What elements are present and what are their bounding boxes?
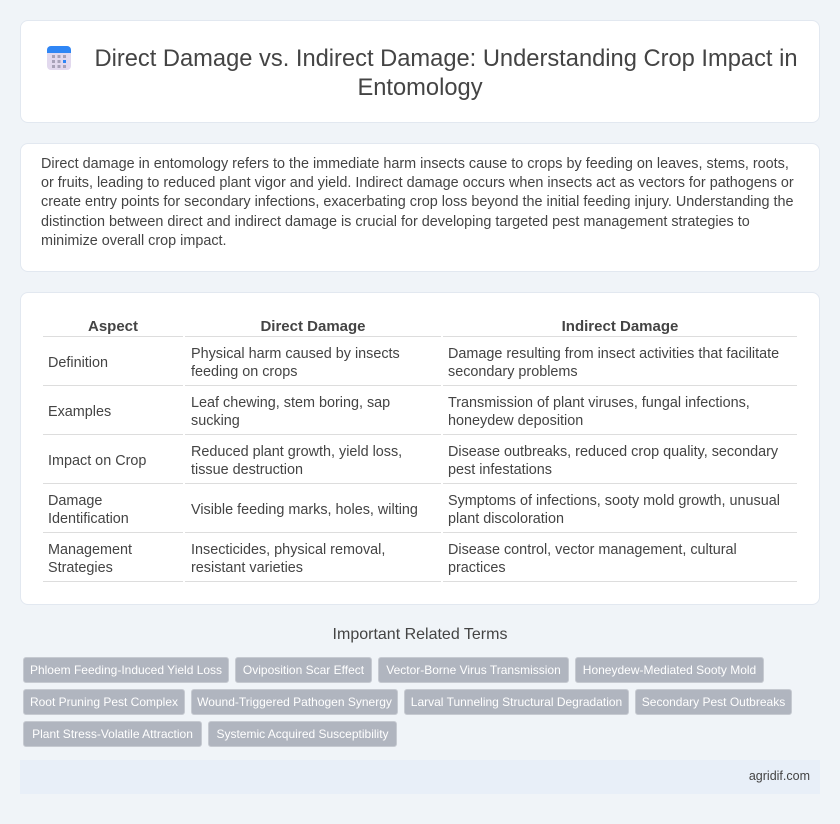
tags: related terms	[23, 657, 792, 747]
row: impact on crop	[48, 444, 778, 478]
title	[94, 46, 798, 101]
row: impact on crop: pest infestations	[448, 462, 552, 478]
text block: introduction: Direct damage in entomology refers to the immediate harm insects cause to crops by feeding on leaves, stems, roots,	[41, 156, 789, 172]
table header: direct damage: Direct Damage	[260, 318, 366, 335]
row: management strategies: practices	[448, 560, 506, 576]
row: definition	[48, 346, 779, 380]
row: impact on crop: Reduced plant growth, yield loss,	[191, 444, 402, 460]
tags: related terms: Systemic Acquired Susceptibility	[216, 727, 389, 741]
tags: related terms: Oviposition Scar Effect	[243, 663, 364, 677]
tags: related terms: Secondary Pest Outbreaks	[642, 695, 785, 709]
text block: introduction: minimize overall crop impact.	[41, 233, 227, 249]
row: impact on crop: Disease outbreaks, reduced crop quality, secondary	[448, 444, 778, 460]
tags: related terms: Root Pruning Pest Complex	[30, 695, 178, 709]
row: management strategies: Strategies	[48, 560, 113, 576]
tags: related terms: Honeydew-Mediated Sooty Mold	[583, 663, 756, 677]
row: examples: Examples	[48, 404, 111, 420]
table header: aspect: Aspect	[88, 318, 138, 335]
footer: agridif.com	[749, 769, 810, 783]
row: definition: Damage resulting from insect activities that facilitate	[448, 346, 779, 362]
row: examples: sucking	[191, 413, 240, 429]
title: Direct Damage vs. Indirect Damage: Understanding Crop Impact in	[94, 46, 798, 72]
panel: introduction	[20, 143, 820, 272]
tags: related terms: Larval Tunneling Structural Degradation	[411, 695, 622, 709]
footer	[20, 760, 820, 794]
row: definition: feeding on crops	[191, 364, 297, 380]
row: damage identification: Symptoms of infections, sooty mold growth, unusual	[448, 493, 780, 509]
heading: important related terms: Important Related Terms	[333, 626, 507, 643]
text block: introduction: distinction between direct and indirect damage is crucial for developing targeted pest management strategies to	[41, 214, 750, 230]
row: impact on crop: tissue destruction	[191, 462, 303, 478]
row: examples: Leaf chewing, stem boring, sap	[191, 395, 390, 411]
title: Entomology	[357, 75, 483, 101]
panel: comparison table	[20, 292, 820, 605]
row: damage identification	[48, 493, 780, 527]
text block: introduction: or fruits, leading to reduced plant vigor and yield. Indirect damage occurs when insects act as vectors for pathogens or	[41, 175, 794, 191]
row: examples	[48, 395, 750, 429]
panel: header	[20, 20, 820, 123]
row: damage identification: Visible feeding marks, holes, wilting	[191, 502, 418, 518]
text block: introduction: create entry points for secondary infections, exacerbating crop loss beyond the initial feeding injury. Understanding the	[41, 194, 793, 210]
row: management strategies: Insecticides, physical removal,	[191, 542, 385, 558]
tags: related terms: Wound-Triggered Pathogen Synergy	[197, 695, 392, 709]
table header: indirect damage: Indirect Damage	[562, 318, 678, 335]
row: management strategies: Disease control, vector management, cultural	[448, 542, 737, 558]
row: damage identification: Identification	[48, 511, 129, 527]
row: examples: Transmission of plant viruses, fungal infections,	[448, 395, 750, 411]
row: damage identification: plant discoloration	[448, 511, 564, 527]
row: definition: Physical harm caused by insects	[191, 346, 400, 362]
icon: calendar	[47, 46, 71, 70]
row: damage identification: Damage	[48, 493, 102, 509]
row: management strategies: resistant varieties	[191, 560, 303, 576]
row: examples: honeydew deposition	[448, 413, 583, 429]
row: management strategies	[48, 542, 737, 576]
row: management strategies: Management	[48, 542, 132, 558]
text block: introduction	[41, 156, 794, 249]
row: impact on crop: Impact on Crop	[48, 453, 146, 469]
tags: related terms: Plant Stress-Volatile Attraction	[32, 727, 193, 741]
tags: related terms: Phloem Feeding-Induced Yield Loss	[30, 663, 222, 677]
tags: related terms: Vector-Borne Virus Transmission	[386, 663, 561, 677]
row: definition: Definition	[48, 355, 108, 371]
row: definition: secondary problems	[448, 364, 578, 380]
